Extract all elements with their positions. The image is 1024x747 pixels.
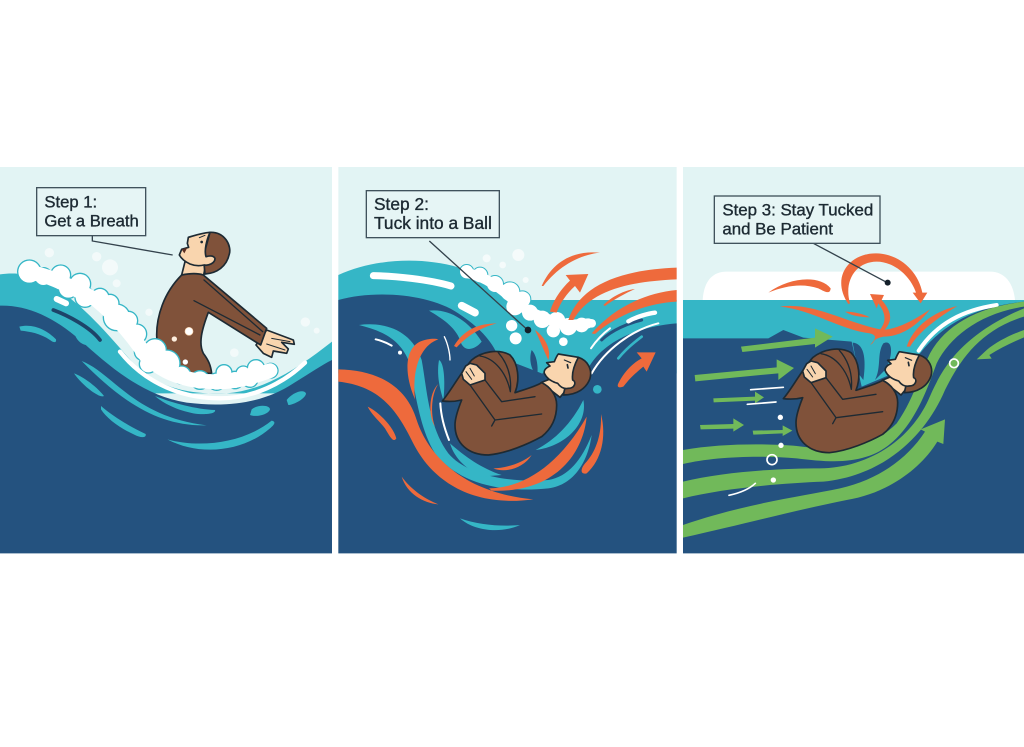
- pale spray bubbles: [45, 248, 320, 357]
- navy eddies behind the figure: [853, 342, 891, 380]
- panel: step 3 stay tucked and be patient: [683, 167, 1024, 553]
- callout: step 2: Tuck into a Ball: [374, 213, 492, 233]
- callout: step 2: [366, 191, 531, 333]
- wave: deep navy water: [338, 295, 677, 553]
- wave: teal crest: [0, 273, 332, 394]
- white cloud band at the horizon: [703, 272, 1015, 300]
- white streak along the wave: [919, 305, 997, 351]
- figure: person with head back taking a breath: [157, 232, 294, 373]
- turbulence: orange arrows at the surface: [768, 253, 957, 347]
- figure: person staying tucked: [783, 349, 932, 453]
- callout: step 2: Step 2:: [374, 194, 429, 214]
- panel: step 2 tuck into a ball: [338, 167, 677, 553]
- callout: step 1: [37, 188, 173, 255]
- figure: person tucked into a ball: [442, 351, 591, 455]
- callout: step 3: [714, 196, 891, 286]
- whirlpool: orange force streaks: [338, 252, 677, 504]
- wave: foam crest: [18, 261, 277, 390]
- current: green arrows: [695, 328, 833, 436]
- callout: step 3: and Be Patient: [722, 220, 833, 239]
- wave: teal breaking crest: [338, 261, 677, 373]
- current: green flow bands: [683, 302, 1024, 538]
- bubbles on torso: [172, 327, 193, 365]
- white foam streaks: [57, 299, 305, 398]
- wave: teal surface: [683, 300, 1024, 393]
- whirlpool: teal currents: [359, 310, 602, 530]
- panel: step 1 get a breath: [0, 167, 332, 553]
- bubbles and white streaks: [729, 359, 958, 495]
- whirlpool: navy and white streaks on right: [373, 276, 658, 440]
- callout: step 1: Step 1:: [44, 193, 97, 212]
- callout: step 1: Get a Breath: [44, 211, 139, 230]
- callout: step 3: Step 3: Stay Tucked: [722, 201, 873, 220]
- wave: foam: [460, 249, 596, 346]
- wave: deep navy water: [683, 302, 1024, 553]
- wave: teal current streaks: [19, 310, 306, 450]
- wave: deep navy water: [0, 306, 332, 553]
